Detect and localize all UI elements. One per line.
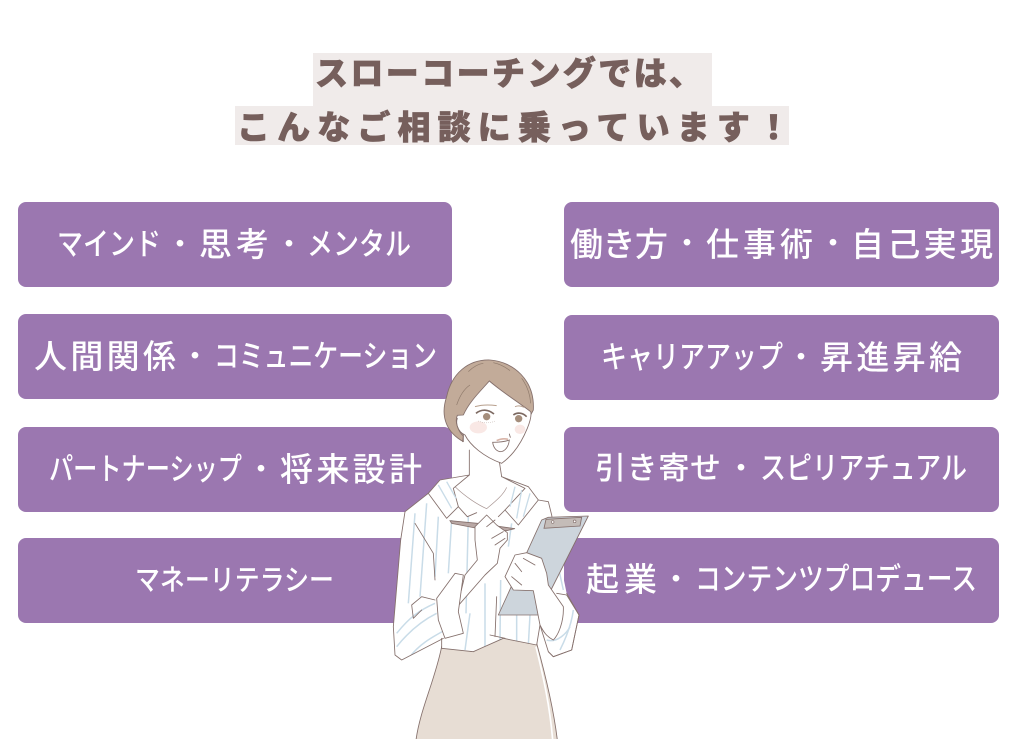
- topic: relationships: 人間関係: [34, 338, 176, 375]
- panel: right topics: [564, 202, 999, 623]
- pen: [450, 521, 515, 531]
- skirt: [416, 637, 557, 739]
- topic: partnership: [18, 427, 452, 512]
- title highlight background: [235, 53, 789, 145]
- topic: work: [564, 202, 999, 287]
- topic: mind: [18, 202, 452, 287]
- topic: career: ・: [788, 342, 814, 372]
- ear: [457, 418, 463, 442]
- hair: [444, 360, 533, 442]
- necklace: [455, 487, 507, 509]
- topic: mind: 思考: [199, 226, 269, 263]
- topic: business: [564, 538, 999, 623]
- topic: spiritual: [564, 427, 999, 512]
- mouth: [493, 439, 509, 452]
- topic: career: キャリアアップ: [601, 340, 783, 375]
- topic: money literacy: [18, 538, 452, 623]
- cheeks: [470, 421, 487, 433]
- topic: money literacy: マネーリテラシー: [135, 565, 334, 597]
- topic: relationships: [18, 314, 452, 399]
- topic: relationships: ・: [182, 341, 208, 371]
- panel: left topics: [18, 202, 452, 623]
- topic: career: 昇進昇給: [820, 339, 962, 376]
- neck and chest: [453, 450, 525, 510]
- topic: work: ・: [820, 228, 846, 258]
- title line 1: スローコーチングでは、: [315, 55, 702, 92]
- left cuff: [437, 573, 463, 638]
- illustration: woman with clipboard: [393, 360, 588, 739]
- topic: spiritual: 引き寄せ: [595, 451, 721, 486]
- topic: mind: メンタル: [307, 227, 411, 262]
- topic: partnership: ・: [248, 454, 274, 484]
- topic: mind: マインド: [57, 227, 161, 262]
- sleeve fold: [412, 597, 435, 618]
- title: [235, 53, 790, 146]
- topic: partnership: 将来設計: [280, 451, 422, 488]
- shirt placket: [490, 597, 505, 638]
- topic: spiritual: ・: [728, 453, 754, 483]
- topic: relationships: コミュニケーション: [214, 339, 437, 374]
- eyes and brows: [475, 405, 527, 423]
- right cuff: [548, 593, 579, 657]
- topic: work: ・: [674, 228, 700, 258]
- topic: work: 働き方: [570, 226, 668, 263]
- collar: [428, 475, 538, 525]
- topic: mind: ・: [276, 229, 302, 259]
- topic: work: 仕事術: [706, 226, 813, 263]
- topic: business: ・: [663, 564, 689, 594]
- left forearm and hand: [457, 515, 507, 607]
- topic: business: 起業: [586, 561, 657, 598]
- shirt fold: [415, 523, 435, 580]
- topic: partnership: パートナーシップ: [49, 452, 242, 487]
- title line 2: こんなご相談に乗っています！: [237, 109, 790, 146]
- topic: career: [564, 315, 999, 400]
- shirt: [393, 475, 579, 660]
- topic: work: 自己実現: [851, 226, 993, 263]
- hair strands: [457, 363, 531, 405]
- right forearm and hand: [505, 553, 563, 640]
- topic: spiritual: スピリアチュアル: [760, 451, 967, 486]
- topic: mind: ・: [167, 229, 193, 259]
- clipboard: [498, 516, 588, 615]
- nose: [509, 434, 510, 437]
- face: [456, 381, 531, 463]
